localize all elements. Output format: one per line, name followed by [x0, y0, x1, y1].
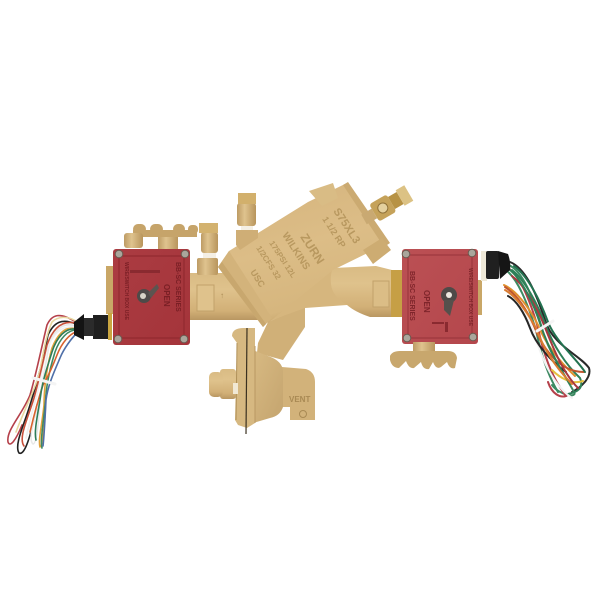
angled ball valve [359, 184, 414, 228]
box lettering [408, 268, 473, 327]
right flange and white spacer [478, 251, 487, 315]
cast lettering: ZURN [297, 231, 327, 267]
left pipe section: ↑ [220, 291, 224, 300]
left test cock [197, 223, 218, 275]
middle pipe underside [268, 268, 352, 322]
left pipe section [190, 273, 268, 320]
toggle [137, 289, 151, 303]
right wire tie [537, 321, 553, 331]
relief valve plug [209, 369, 236, 399]
relief valve outlet elbow: VENT [289, 395, 310, 404]
screws [114, 250, 189, 343]
top lug [309, 183, 338, 206]
screws [402, 249, 477, 342]
cast lettering: 175PSI 12L [267, 239, 298, 280]
left cable gland [74, 313, 112, 340]
side lug [363, 238, 391, 264]
cast lettering: USC [248, 268, 267, 289]
right cable gland [486, 251, 510, 279]
box lettering: OPEN [422, 290, 431, 313]
box lettering [123, 262, 181, 321]
box lettering: BB-SC SERIES [174, 262, 181, 312]
box lettering: WIRE/SWITCH BOX USE [123, 262, 129, 321]
box lettering: OPEN [162, 284, 171, 307]
cast lettering: S75XL3 [330, 206, 362, 246]
cast lettering: 1/2CFS 32 [254, 244, 283, 282]
cast lettering [248, 206, 362, 289]
cast lettering: WILKINS [279, 231, 312, 272]
threaded nipple [391, 270, 403, 317]
top left handle [124, 224, 198, 250]
left wire tie [33, 378, 55, 384]
cast lettering: 1 1/2 RP [320, 215, 348, 249]
relief valve outlet elbow [282, 367, 315, 420]
lower elbow pipe [257, 306, 305, 360]
bottom right handle [390, 342, 457, 369]
left flange behind box [106, 266, 114, 314]
right switch box [402, 249, 478, 344]
box lettering: BB-SC SERIES [408, 271, 415, 321]
left switch box [113, 249, 190, 345]
cap rim [343, 182, 390, 247]
left wire bundle [8, 316, 76, 453]
toggle [441, 287, 457, 303]
relief valve dome [250, 349, 283, 424]
tall test cock [236, 193, 258, 250]
right elbow [331, 266, 392, 317]
main cylinder body [218, 182, 391, 327]
relief valve flange [232, 328, 255, 434]
end flange [218, 251, 272, 327]
box lettering: WIRE/SWITCH BOX USE [467, 268, 473, 327]
right wire bundle [504, 262, 589, 398]
